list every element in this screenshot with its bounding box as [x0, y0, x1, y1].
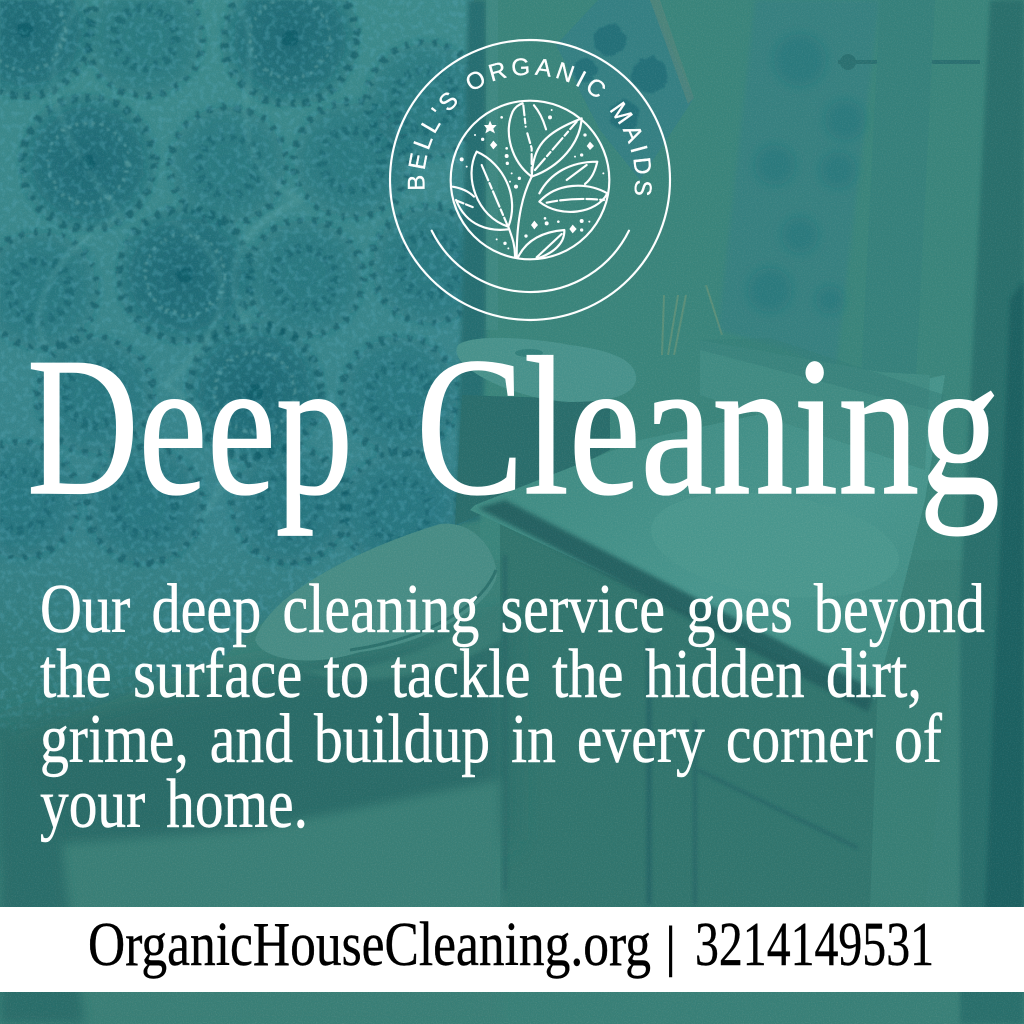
- floor: [58, 780, 500, 1024]
- toilet base shadow below tank: [455, 395, 610, 525]
- website and phone: OrganicHouseCleaning.org: [88, 911, 651, 979]
- door frame: [870, 600, 960, 910]
- inner circle: [451, 101, 609, 259]
- website and phone: 3214149531: [695, 911, 934, 979]
- toilet lid and seat: [255, 524, 500, 679]
- wall: [480, 0, 1000, 560]
- crescent: [432, 231, 629, 292]
- cabinet: [500, 510, 880, 910]
- towel bar: [838, 54, 980, 70]
- door trim and right shadow: [860, 0, 935, 400]
- mirror reflection: curtain: [718, 0, 880, 375]
- cabinet door lines: [505, 555, 858, 905]
- title: Deep: [27, 317, 353, 536]
- contact banner: [0, 907, 1024, 992]
- dark gap beside curtain: [455, 0, 486, 525]
- shower curtain: [0, 0, 496, 740]
- backsplash: [700, 340, 930, 470]
- wall art tile: [556, 0, 694, 180]
- reed diffuser sticks: [662, 285, 722, 355]
- website and phone: |: [665, 916, 676, 978]
- description text: your home.: [40, 766, 308, 843]
- sink bowl: [644, 478, 906, 612]
- counter shadow edge: [478, 500, 875, 712]
- toilet tank: [456, 338, 636, 402]
- vanity counter: [470, 375, 945, 700]
- outer ring: [390, 40, 670, 320]
- title: [27, 317, 1000, 536]
- leaf sprig: [453, 103, 607, 259]
- sparkles and dots: [460, 109, 604, 249]
- circular brand name: BELL'S ORGANIC MAIDS: [408, 58, 652, 196]
- logo: Bell's Organic Maids: [388, 38, 672, 322]
- description text: [40, 571, 985, 843]
- dark bowl shadow: [0, 620, 510, 860]
